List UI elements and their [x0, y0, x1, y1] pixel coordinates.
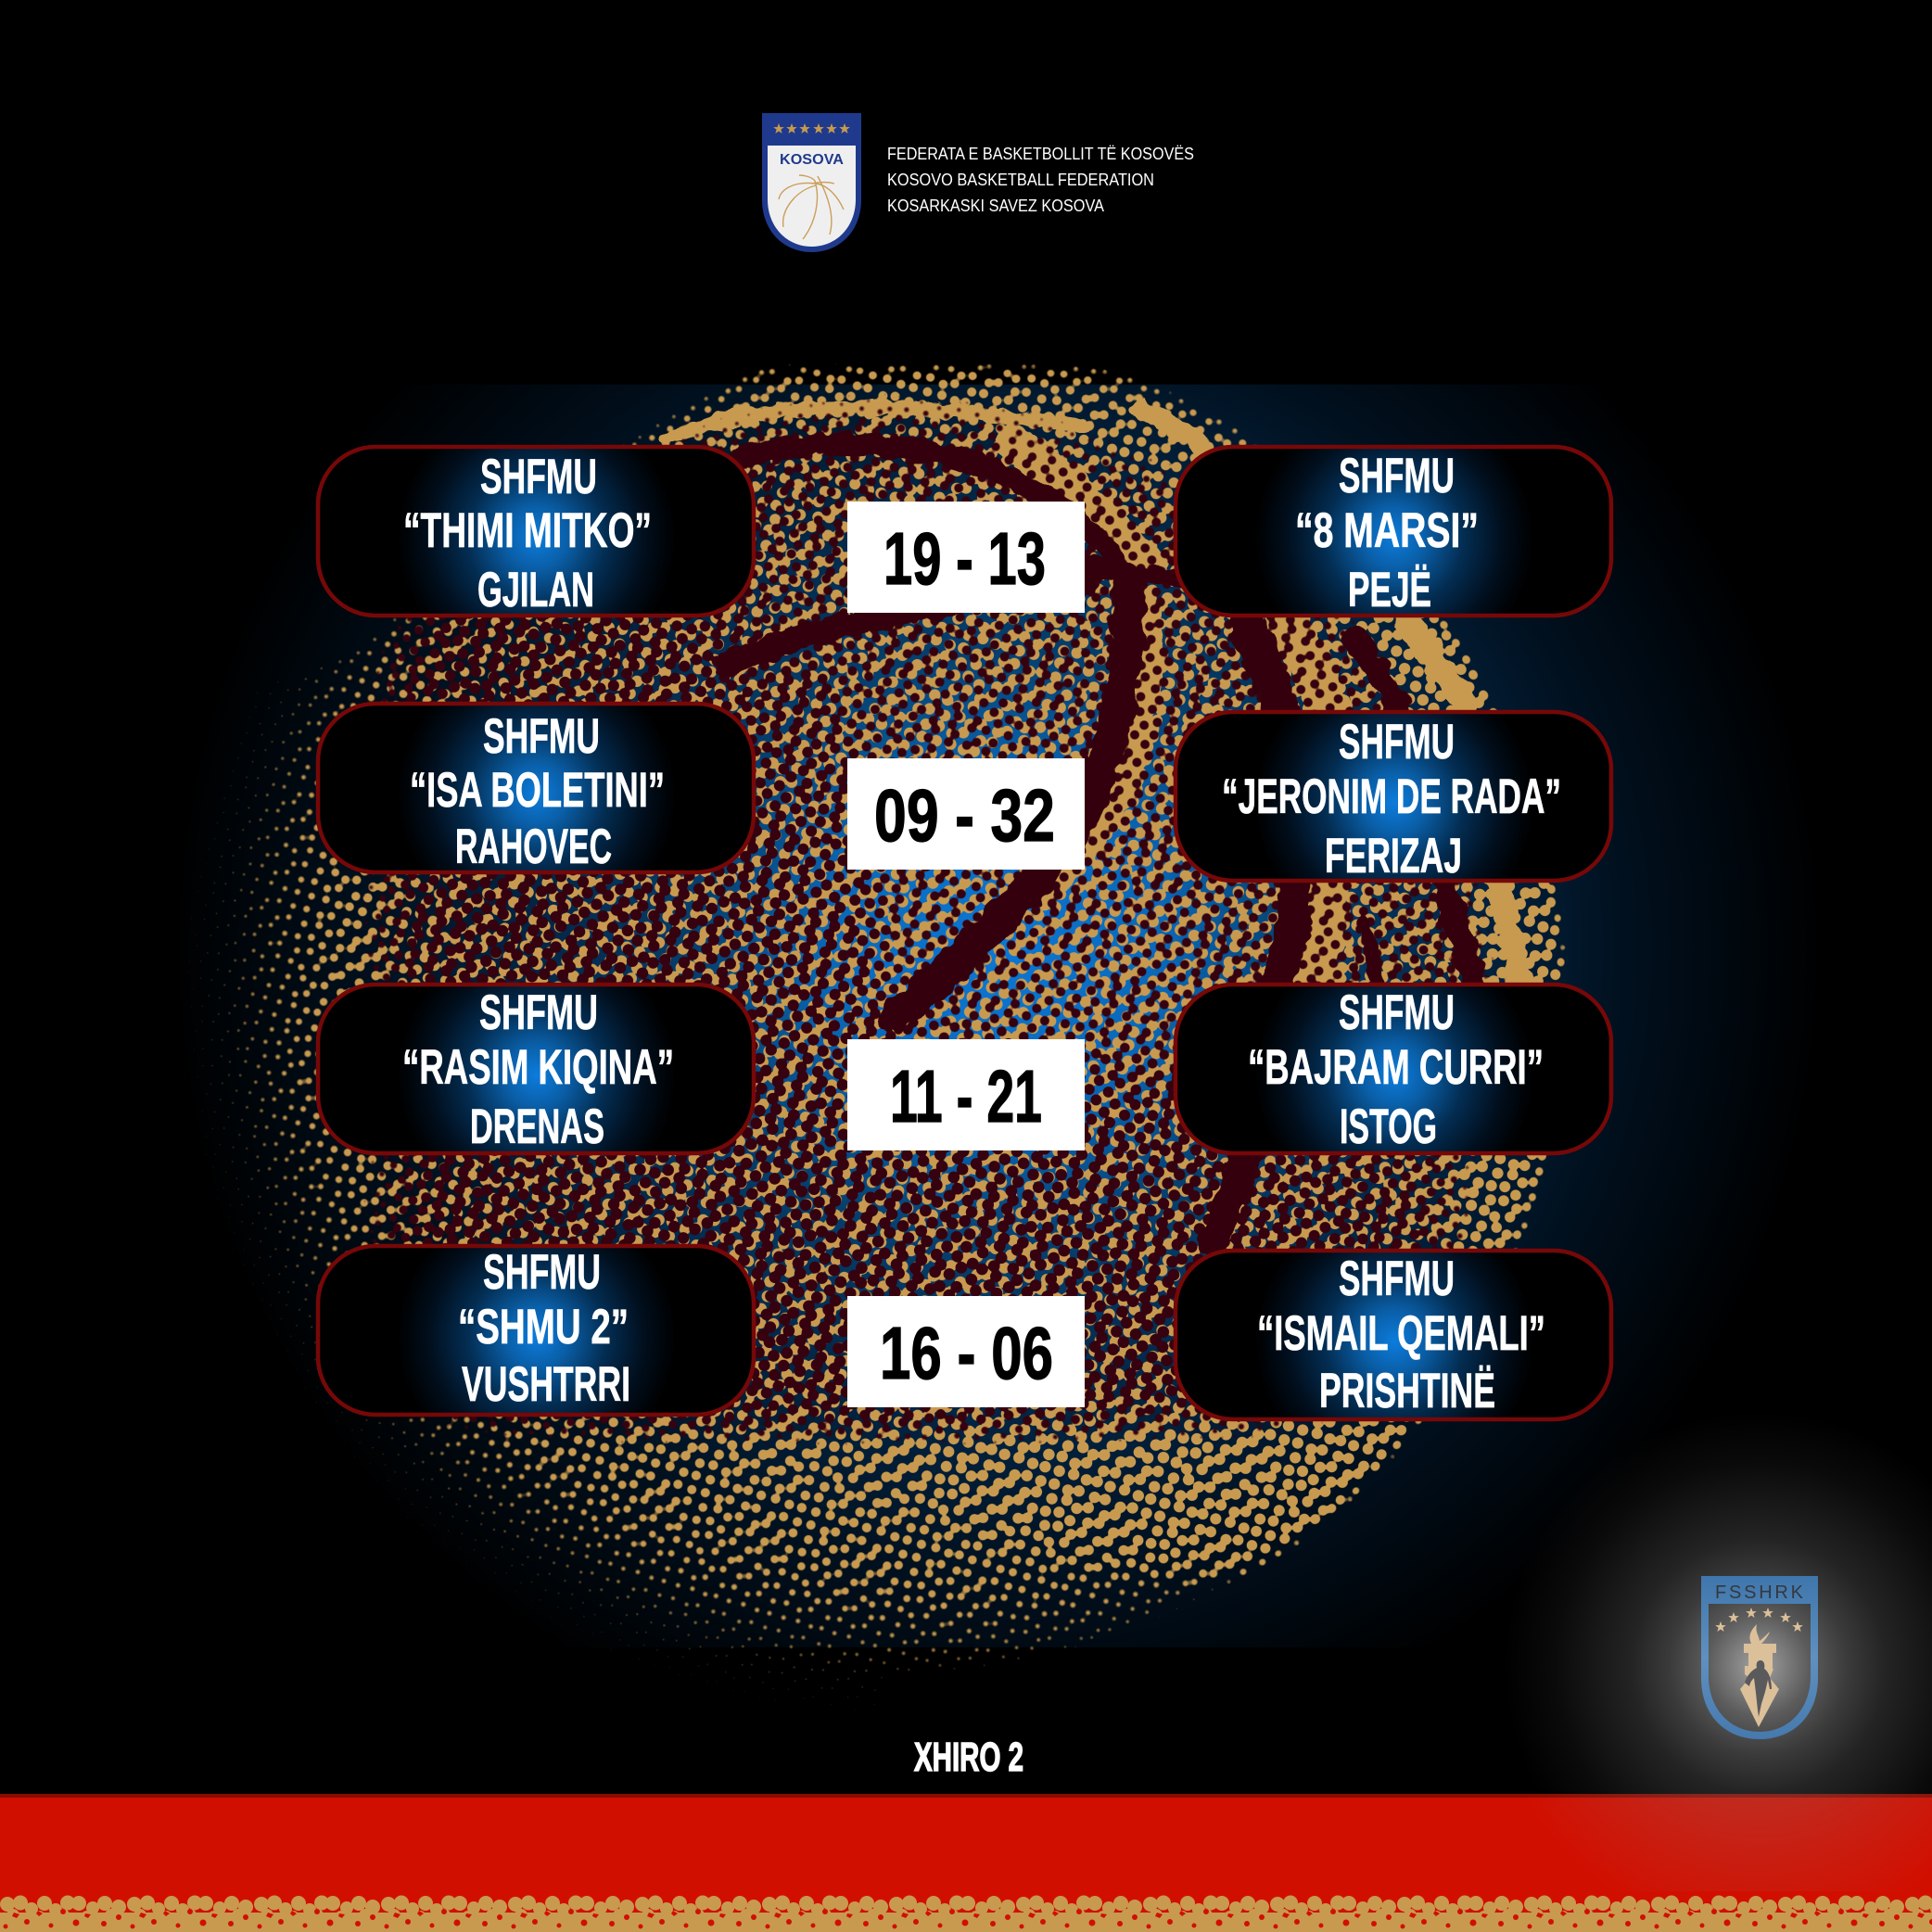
card: Rasim Kiqina Drenas: “RASIM KIQINA” — [402, 1040, 674, 1095]
federation name text: KOSOVO BASKETBALL FEDERATION — [887, 171, 1154, 189]
maroon ball seams — [727, 444, 1474, 1242]
score: 11 - 21: 11 - 21 — [890, 1055, 1042, 1138]
card: Thimi Mitko Gjilan — [318, 447, 754, 617]
basketball halftone illustration — [182, 363, 1772, 1715]
card: Bajram Curri Istog: ISTOG — [1340, 1099, 1437, 1154]
federation shield logo — [762, 113, 861, 252]
card: Bajram Curri Istog — [1176, 985, 1611, 1154]
card: 8 Marsi Pejë — [1176, 447, 1611, 617]
card: Shmu 2 Vushtrri — [318, 1245, 754, 1415]
gold halftone dots — [182, 363, 1566, 1715]
card: Rasim Kiqina Drenas: SHFMU — [479, 985, 598, 1040]
card: Thimi Mitko Gjilan: GJILAN — [477, 563, 594, 617]
card: Shmu 2 Vushtrri: VUSHTRRI — [462, 1357, 630, 1412]
federation shield logo: KOSOVA — [780, 152, 844, 168]
card: Ismail Qemali Prishtinë: SHFMU — [1339, 1252, 1455, 1306]
school sports federation crest — [1701, 1576, 1818, 1739]
score: 19 - 13: 19 - 13 — [883, 517, 1046, 600]
crest glow — [1504, 1411, 1932, 1921]
card: Jeronim de Rada Ferizaj: FERIZAJ — [1325, 829, 1462, 883]
score: 16 - 06 — [847, 1296, 1085, 1407]
maroon halftone dots — [359, 393, 1494, 1446]
score: 19 - 13 — [847, 502, 1085, 613]
federation name text — [887, 145, 1194, 215]
score: 09 - 32: 09 - 32 — [874, 774, 1055, 857]
card: Rasim Kiqina Drenas: DRENAS — [470, 1099, 604, 1154]
card: Isa Boletini Rahovec: RAHOVEC — [455, 820, 612, 874]
card: Bajram Curri Istog: SHFMU — [1339, 985, 1455, 1040]
gold ball seams — [666, 407, 1518, 981]
school sports federation crest: FSSHRK — [1715, 1582, 1804, 1603]
card: Thimi Mitko Gjilan: SHFMU — [480, 450, 597, 504]
card: Jeronim de Rada Ferizaj — [1176, 712, 1611, 883]
card: 8 Marsi Pejë: SHFMU — [1339, 449, 1455, 503]
card: Bajram Curri Istog: “BAJRAM CURRI” — [1248, 1040, 1544, 1095]
score: 11 - 21 — [847, 1039, 1085, 1150]
card: 8 Marsi Pejë: “8 MARSI” — [1295, 503, 1479, 558]
round label: XHIRO 2 — [914, 1735, 1023, 1780]
card: Rasim Kiqina Drenas — [318, 985, 754, 1154]
federation name text: KOSARKASKI SAVEZ KOSOVA — [887, 197, 1104, 215]
card: Shmu 2 Vushtrri: SHFMU — [483, 1245, 601, 1300]
card: 8 Marsi Pejë: PEJË — [1348, 563, 1431, 617]
card: Shmu 2 Vushtrri: “SHMU 2” — [458, 1300, 629, 1354]
score: 16 - 06: 16 - 06 — [880, 1312, 1053, 1394]
card: Isa Boletini Rahovec: “ISA BOLETINI” — [410, 763, 665, 818]
card: Ismail Qemali Prishtinë: PRISHTINË — [1319, 1364, 1495, 1418]
footer red band — [0, 1794, 1932, 1932]
card: Isa Boletini Rahovec: SHFMU — [483, 709, 600, 764]
score: 09 - 32 — [847, 758, 1085, 870]
card: Isa Boletini Rahovec — [318, 704, 754, 874]
federation name text: FEDERATA E BASKETBOLLIT TË KOSOVËS — [887, 145, 1194, 163]
blue glow backdrop — [0, 385, 1932, 1647]
glow over band — [1483, 1794, 1932, 1891]
card: Thimi Mitko Gjilan: “THIMI MITKO” — [403, 503, 652, 558]
card: Ismail Qemali Prishtinë: “ISMAIL QEMALI” — [1257, 1306, 1545, 1361]
card: Jeronim de Rada Ferizaj: SHFMU — [1339, 715, 1455, 769]
card: Jeronim de Rada Ferizaj: “JERONIM DE RADA” — [1222, 769, 1561, 824]
card: Ismail Qemali Prishtinë — [1176, 1251, 1611, 1419]
